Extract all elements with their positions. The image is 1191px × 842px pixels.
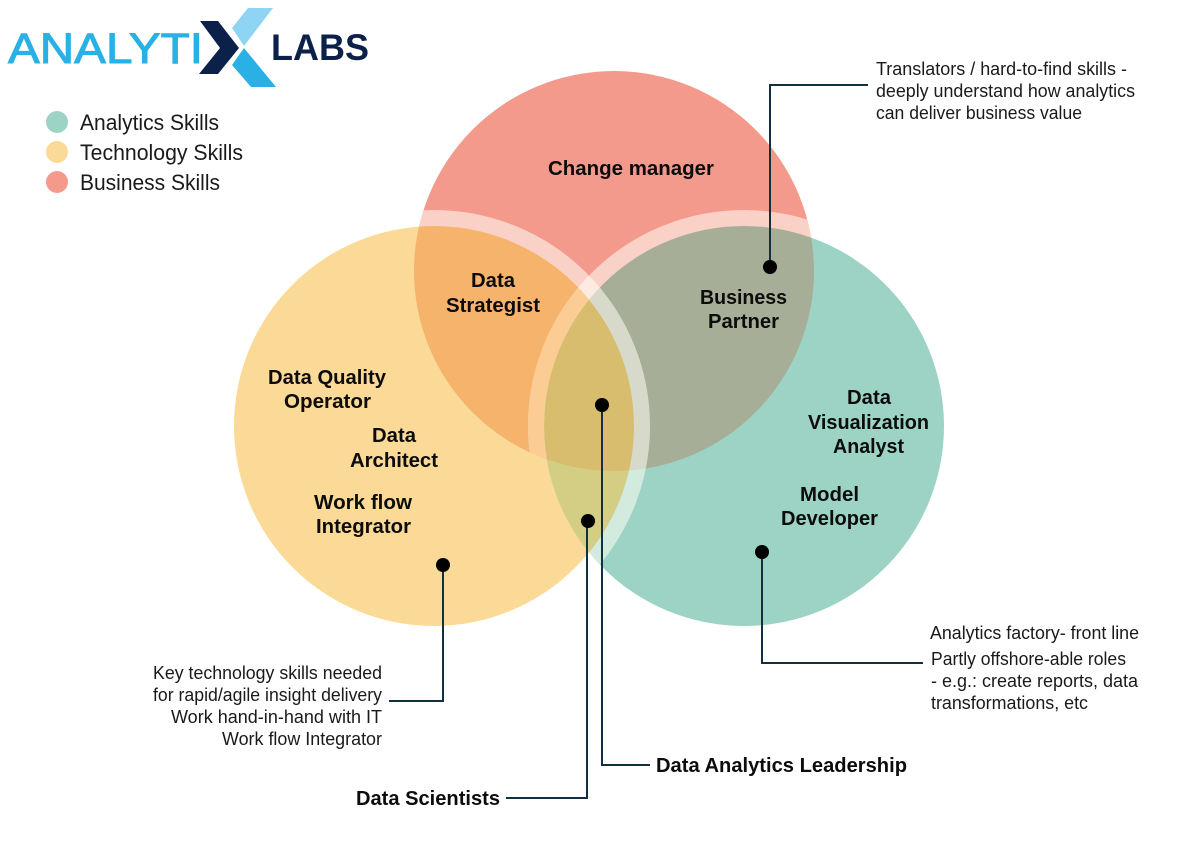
dot: data scientists bbox=[581, 514, 595, 528]
callout text: translators: Translators / hard-to-find skills - bbox=[876, 59, 1127, 79]
callout text: key technology skills: Key technology skills needed bbox=[153, 663, 382, 683]
legend bbox=[46, 110, 243, 195]
legend swatch: analytics bbox=[46, 111, 68, 133]
label: Data Visualization Analyst bbox=[808, 387, 929, 458]
callout: data scientists bbox=[356, 514, 595, 810]
logo X: light blue arm bbox=[232, 8, 273, 46]
legend label: business: Business Skills bbox=[80, 170, 220, 195]
overlap: business and technology bbox=[414, 226, 578, 456]
logo X: mid blue arm bbox=[232, 48, 276, 87]
label: Work flow Integrator: Work flow bbox=[314, 492, 412, 514]
leader line: leadership bbox=[602, 405, 650, 765]
label: Data Quality Operator: Data Quality bbox=[268, 367, 387, 389]
callout label: Data Scientists: Data Scientists bbox=[356, 788, 500, 810]
label: Data Architect bbox=[350, 425, 438, 472]
callout text: translators: can deliver business value bbox=[876, 103, 1082, 123]
label: Data Visualization Analyst: Data bbox=[847, 387, 892, 409]
circle: analytics skills bbox=[544, 226, 944, 626]
callout text: translators: deeply understand how analytics bbox=[876, 81, 1135, 101]
label: Model Developer bbox=[781, 484, 878, 530]
label: Work flow Integrator: Integrator bbox=[316, 516, 411, 538]
leader line: business partner bbox=[770, 85, 868, 267]
label: Data Quality Operator bbox=[268, 367, 387, 413]
callout text: key technology skills: Work flow Integrator bbox=[222, 729, 382, 749]
logo: AnalytiX Labs bbox=[8, 8, 369, 87]
legend label: analytics: Analytics Skills bbox=[80, 110, 219, 135]
callout text: analytics factory: Analytics factory- front line bbox=[930, 623, 1139, 643]
label: Model Developer: Model bbox=[800, 484, 859, 506]
dot: model developer bbox=[755, 545, 769, 559]
callout text: analytics factory: Partly offshore-able roles bbox=[931, 649, 1126, 669]
logo wordmark: LABS: LABS bbox=[271, 27, 369, 68]
label: Model Developer: Developer bbox=[781, 508, 878, 530]
label: Data Strategist: Data bbox=[471, 270, 516, 292]
label: Data Strategist bbox=[446, 270, 540, 317]
label: Business Partner: Business bbox=[700, 287, 787, 309]
label: Data Architect: Data bbox=[372, 425, 417, 447]
legend label: technology: Technology Skills bbox=[80, 140, 243, 165]
dot: leadership bbox=[595, 398, 609, 412]
label: Business Partner bbox=[700, 287, 787, 333]
overlap: business and analytics bbox=[589, 226, 814, 470]
callout: business partner bbox=[763, 59, 1135, 274]
logo X: dark chevron bbox=[199, 21, 239, 74]
ring: analytics halo over orange overlap bbox=[528, 288, 589, 460]
circle: technology skills bbox=[234, 226, 634, 626]
label: Data Architect: Architect bbox=[350, 450, 438, 472]
dot: technology skills bbox=[436, 558, 450, 572]
callout: model developer bbox=[755, 545, 1139, 713]
label: Work flow Integrator bbox=[314, 492, 412, 538]
leader line: model developer bbox=[762, 552, 923, 663]
role labels bbox=[268, 158, 929, 538]
callout text: key technology skills: for rapid/agile insight delivery bbox=[153, 685, 382, 705]
leader line: data scientists bbox=[506, 521, 587, 798]
ring: halo around analytics circle bbox=[528, 210, 811, 460]
overlap: technology and analytics bbox=[547, 301, 634, 552]
callout text: key technology skills: Work hand-in-hand with IT bbox=[171, 707, 382, 727]
callout text: translators bbox=[876, 59, 1135, 123]
label: Data Visualization Analyst: Visualization bbox=[808, 412, 929, 434]
leader line: technology skills bbox=[389, 565, 443, 701]
callout text: analytics factory bbox=[930, 623, 1139, 713]
callout text: key technology skills bbox=[153, 663, 382, 749]
callout text: analytics factory: - e.g.: create reports, data bbox=[931, 671, 1139, 691]
legend swatch: business bbox=[46, 171, 68, 193]
legend swatch: technology bbox=[46, 141, 68, 163]
callout label: Data Analytics Leadership: Data Analytics Leadership bbox=[656, 755, 907, 777]
callout text: analytics factory: transformations, etc bbox=[931, 693, 1088, 713]
venn diagram circles bbox=[226, 71, 952, 634]
ring: halo around technology circle bbox=[419, 210, 650, 564]
circle: business skills bbox=[414, 71, 814, 471]
label: Business Partner: Partner bbox=[708, 311, 779, 333]
overlap: all three bbox=[544, 300, 634, 471]
label: Data Quality Operator: Operator bbox=[284, 391, 371, 413]
label: Change manager: Change manager bbox=[548, 158, 714, 180]
callout: data analytics leadership bbox=[595, 398, 907, 777]
label: Data Visualization Analyst: Analyst bbox=[833, 436, 904, 458]
callout: technology skills bbox=[153, 558, 450, 749]
label: Data Strategist: Strategist bbox=[446, 295, 540, 317]
logo wordmark: ANALYTI: ANALYTI bbox=[8, 25, 203, 73]
dot: business partner bbox=[763, 260, 777, 274]
